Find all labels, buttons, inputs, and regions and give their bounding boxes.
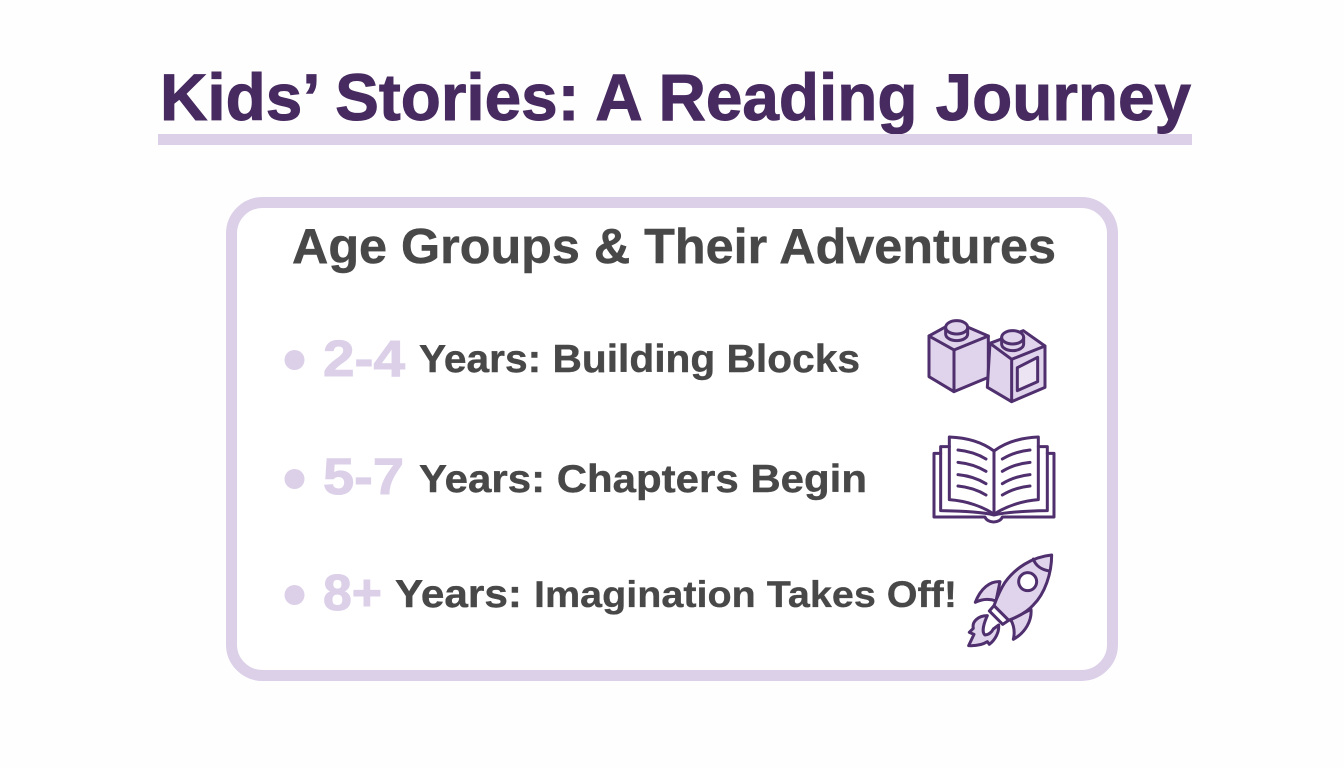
icon: open book bbox=[934, 437, 1054, 522]
row: 2-4 years bbox=[284, 330, 860, 387]
panel: age groups bbox=[232, 202, 1112, 676]
title: Kids’ Stories: A Reading Journey bbox=[160, 60, 1191, 134]
row: 5-7 years: Years: Chapters Begin bbox=[419, 458, 867, 501]
icon: building blocks bbox=[929, 321, 1045, 402]
row: 5-7 years: 5-7 bbox=[323, 448, 404, 505]
row: 5-7 years bbox=[284, 448, 867, 505]
row: 2-4 years: Years: Building Blocks bbox=[419, 338, 860, 381]
row: 8+ years: Years: bbox=[395, 573, 522, 616]
panel heading: Age Groups & Their Adventures bbox=[292, 220, 1056, 274]
title underline bbox=[158, 134, 1192, 145]
icon: rocket bbox=[969, 555, 1052, 646]
row: 8+ years: 8+ bbox=[323, 564, 382, 621]
row: 8+ years bbox=[284, 564, 957, 621]
row: 2-4 years: 2-4 bbox=[323, 330, 406, 387]
row: 8+ years: Imagination Takes Off! bbox=[534, 574, 957, 615]
